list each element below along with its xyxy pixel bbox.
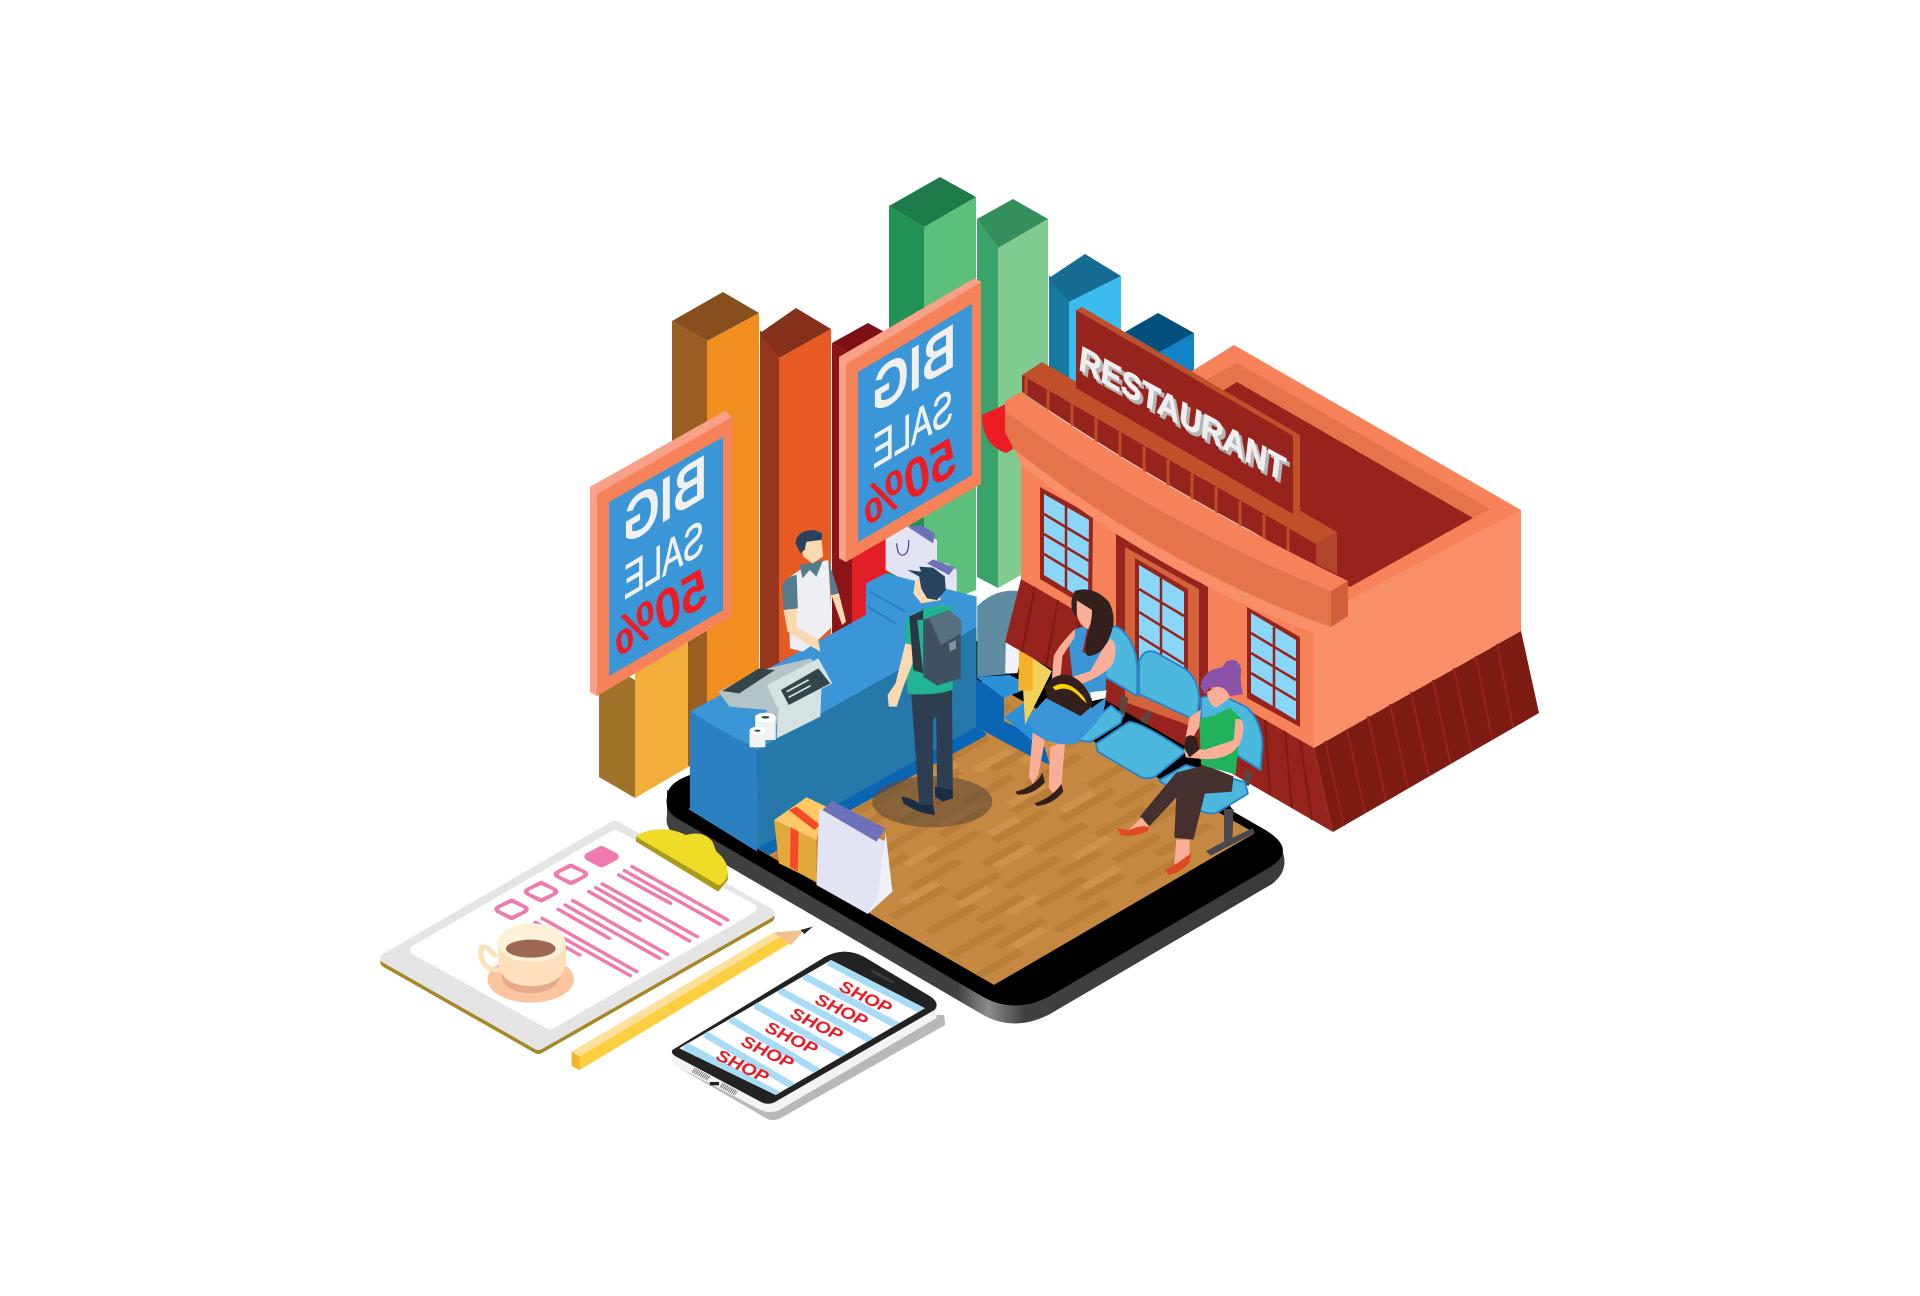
awning end face [1316, 532, 1337, 574]
billboard panel [609, 437, 723, 676]
shop labels: SHOP [713, 1046, 771, 1087]
column: red orange [760, 308, 831, 680]
billboard mirrored text: SALE [873, 379, 953, 480]
screen stripes [684, 962, 925, 1097]
roof rim [1192, 345, 1521, 612]
phone top surface [667, 600, 1283, 1006]
billboard mirrored text [615, 441, 707, 672]
isometric illustration [380, 177, 1539, 1120]
chair bench [1077, 626, 1262, 856]
inner roof rim [1207, 363, 1490, 518]
cornice end [1331, 581, 1348, 627]
restaurant building [982, 307, 1539, 832]
small phone [672, 952, 945, 1120]
billboard frame [839, 278, 981, 562]
shop labels: SHOP [762, 1018, 820, 1059]
billboard mirrored text: BIG [872, 310, 956, 429]
billboard mirrored text: 50% [864, 422, 956, 541]
floor wood planks [688, 682, 1255, 985]
side wall [1314, 510, 1521, 748]
red awning behind building [982, 404, 1013, 453]
restaurant sign: RESTAURANT [1077, 338, 1288, 490]
clothes display [976, 591, 1056, 765]
column: dark red [832, 323, 890, 640]
gift box [774, 797, 826, 882]
billboard left [590, 411, 732, 696]
smartphone base [667, 600, 1284, 1024]
phone side [667, 790, 1284, 1024]
cornice light strip [1014, 449, 1331, 636]
list lines [529, 867, 728, 976]
shop labels: SHOP [738, 1032, 796, 1073]
billboard center [839, 278, 981, 562]
shop labels: SHOP [812, 990, 870, 1031]
awning top band [1022, 362, 1337, 544]
column: light green [977, 199, 1048, 588]
clipboard board [386, 830, 768, 1049]
seated woman with phone [1117, 660, 1244, 875]
coffee cup [481, 923, 574, 1003]
front wall [1021, 449, 1314, 748]
shopping bag on shelf [886, 525, 937, 585]
cornice top [1005, 392, 1348, 591]
phone body [672, 952, 945, 1120]
receipt rolls [750, 713, 776, 747]
pencil [572, 927, 813, 1070]
waiting area, zoom-2 coordinates [1015, 589, 1262, 875]
shop labels: SHOP [836, 977, 894, 1018]
service counter [690, 573, 986, 855]
column: teal blue [1049, 254, 1121, 400]
large shopping bag [816, 801, 892, 914]
side skirt [1314, 631, 1539, 832]
bar chart: colored 3D columns [599, 177, 1194, 798]
column: billboard post [599, 620, 707, 798]
cashier man [782, 530, 846, 652]
customer shadow [872, 776, 992, 827]
shop counter scene, zoom-4 coordinates [690, 525, 992, 914]
column: navy blue [1125, 313, 1194, 400]
checkboxes [499, 850, 614, 916]
billboard mirrored text: SALE [624, 510, 704, 611]
seated woman with bag [1015, 589, 1116, 806]
clipboard clip [636, 829, 728, 892]
shop labels [713, 977, 894, 1087]
customer with backpack [888, 567, 962, 815]
billboard mirrored text [864, 310, 956, 541]
billboard frame [590, 411, 732, 696]
billboard mirrored text: BIG [623, 441, 707, 560]
shop labels: SHOP [787, 1004, 845, 1045]
door [1116, 534, 1208, 729]
column: dark green [889, 177, 976, 610]
clipboard paper [416, 835, 751, 1024]
awning decorated face [1022, 375, 1316, 564]
billboard mirrored text: 50% [615, 553, 707, 672]
cornice front [1005, 411, 1331, 627]
restaurant sign: RESTAURANT [1080, 342, 1291, 494]
roof rim front strip [1348, 509, 1521, 602]
window right [1247, 607, 1300, 727]
small shopping bag on shelf [925, 559, 957, 603]
billboard panel [858, 304, 972, 542]
column: brown and orange [672, 292, 759, 760]
roof interior [1200, 382, 1473, 587]
window left [1040, 487, 1093, 610]
cash register [718, 658, 832, 738]
desk items, zoom-3 coordinates [386, 826, 945, 1120]
front skirt [1005, 579, 1333, 832]
clipboard [386, 826, 768, 1049]
